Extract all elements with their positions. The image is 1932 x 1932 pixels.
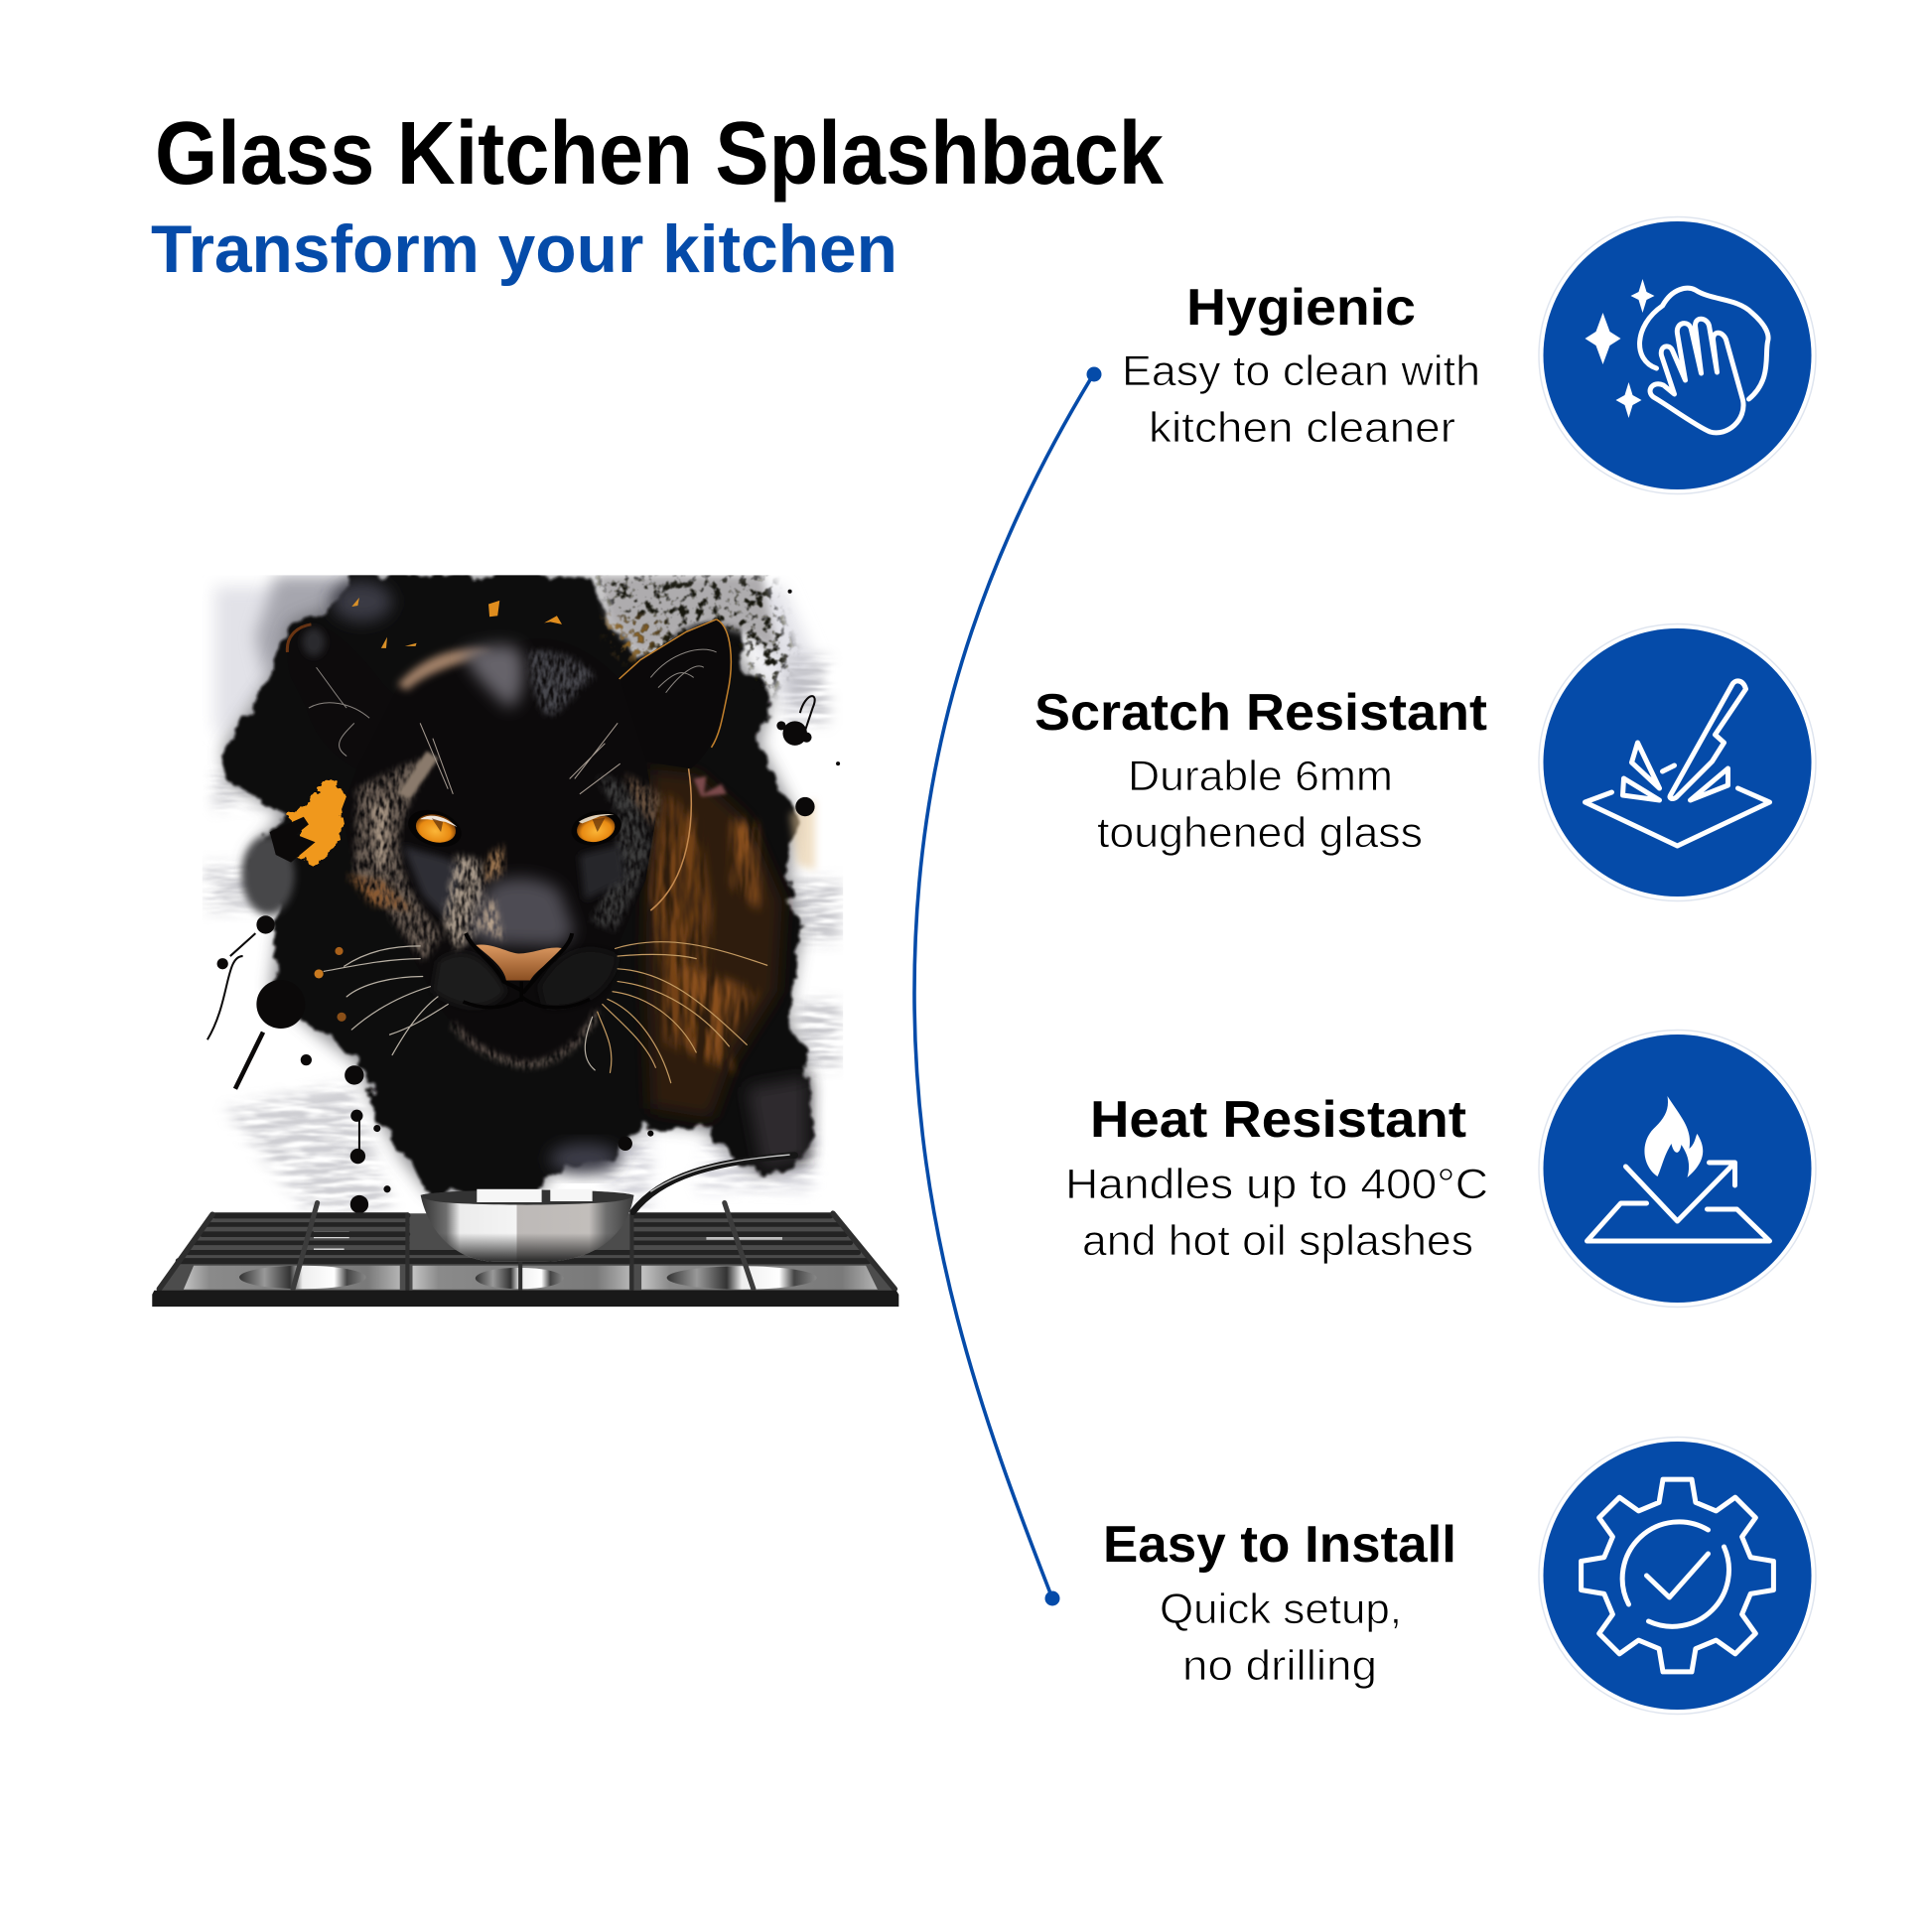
forehead wrinkle lines <box>420 723 621 794</box>
subtitle: Transform your kitchen <box>151 211 897 287</box>
splashback panel with panther artwork <box>203 575 843 1214</box>
panther head <box>342 638 691 1065</box>
feature: Heat Resistant <box>1065 1091 1488 1265</box>
pink specks right of head <box>694 776 727 796</box>
gas hob <box>152 1203 898 1307</box>
description: Handles up to 400°C <box>1065 1161 1488 1208</box>
grey smoke patches inside ink <box>332 582 392 621</box>
forehead highlights <box>397 648 493 690</box>
heading: Scratch Resistant <box>1035 684 1487 742</box>
description <box>1097 753 1423 857</box>
ink splatter <box>217 590 840 1213</box>
orange paint splash <box>286 778 347 865</box>
fur, right cheek <box>590 777 650 931</box>
black ink mass <box>222 575 810 1199</box>
description: no drilling <box>1182 1642 1377 1690</box>
burner trays <box>184 1266 878 1290</box>
nose <box>476 944 564 981</box>
description: toughened glass <box>1097 809 1423 857</box>
chin <box>453 1012 598 1065</box>
icon: hand wiping with sparkles <box>1539 216 1816 494</box>
description: kitchen cleaner <box>1149 404 1455 452</box>
heading: Hygienic <box>1186 279 1416 337</box>
fur, left cheek <box>354 754 443 961</box>
description: Quick setup, <box>1160 1586 1402 1633</box>
grates <box>159 1203 895 1290</box>
pan handle <box>632 1156 795 1212</box>
connector curve with end dots <box>914 367 1102 1606</box>
whiskers <box>324 942 767 1083</box>
title: Glass Kitchen Splashback <box>155 104 1165 204</box>
heading: Heat Resistant <box>1090 1091 1466 1149</box>
muzzle <box>471 879 575 946</box>
feature: Hygienic <box>1122 279 1480 452</box>
description: Easy to clean with <box>1122 347 1480 395</box>
heading: Easy to Install <box>1103 1516 1456 1574</box>
product image: panther splashback above gas hob <box>152 575 898 1307</box>
brown rust fur area <box>645 768 782 1118</box>
description <box>1160 1586 1402 1690</box>
burners <box>239 1231 817 1290</box>
grey paint wash <box>215 587 818 739</box>
description <box>1122 347 1480 452</box>
soft halo around ink <box>222 575 810 1199</box>
description: Durable 6mm <box>1128 753 1393 800</box>
hob front edge <box>152 1291 898 1307</box>
hob surface <box>157 1213 897 1292</box>
pan body <box>421 1190 633 1262</box>
icon: flame on surface <box>1539 1031 1816 1307</box>
frying pan <box>421 1155 795 1262</box>
right eye <box>577 812 621 842</box>
speckled grey and tan paint, top right <box>598 575 777 654</box>
left eye <box>409 814 457 843</box>
feature: Easy to Install <box>1103 1516 1456 1690</box>
icon: gear with check mark <box>1539 1438 1816 1714</box>
feature: Scratch Resistant <box>1035 684 1487 857</box>
icon: knife on glass <box>1539 623 1816 901</box>
description <box>1065 1161 1488 1265</box>
description: and hot oil splashes <box>1082 1217 1473 1265</box>
panther ears <box>287 620 731 773</box>
